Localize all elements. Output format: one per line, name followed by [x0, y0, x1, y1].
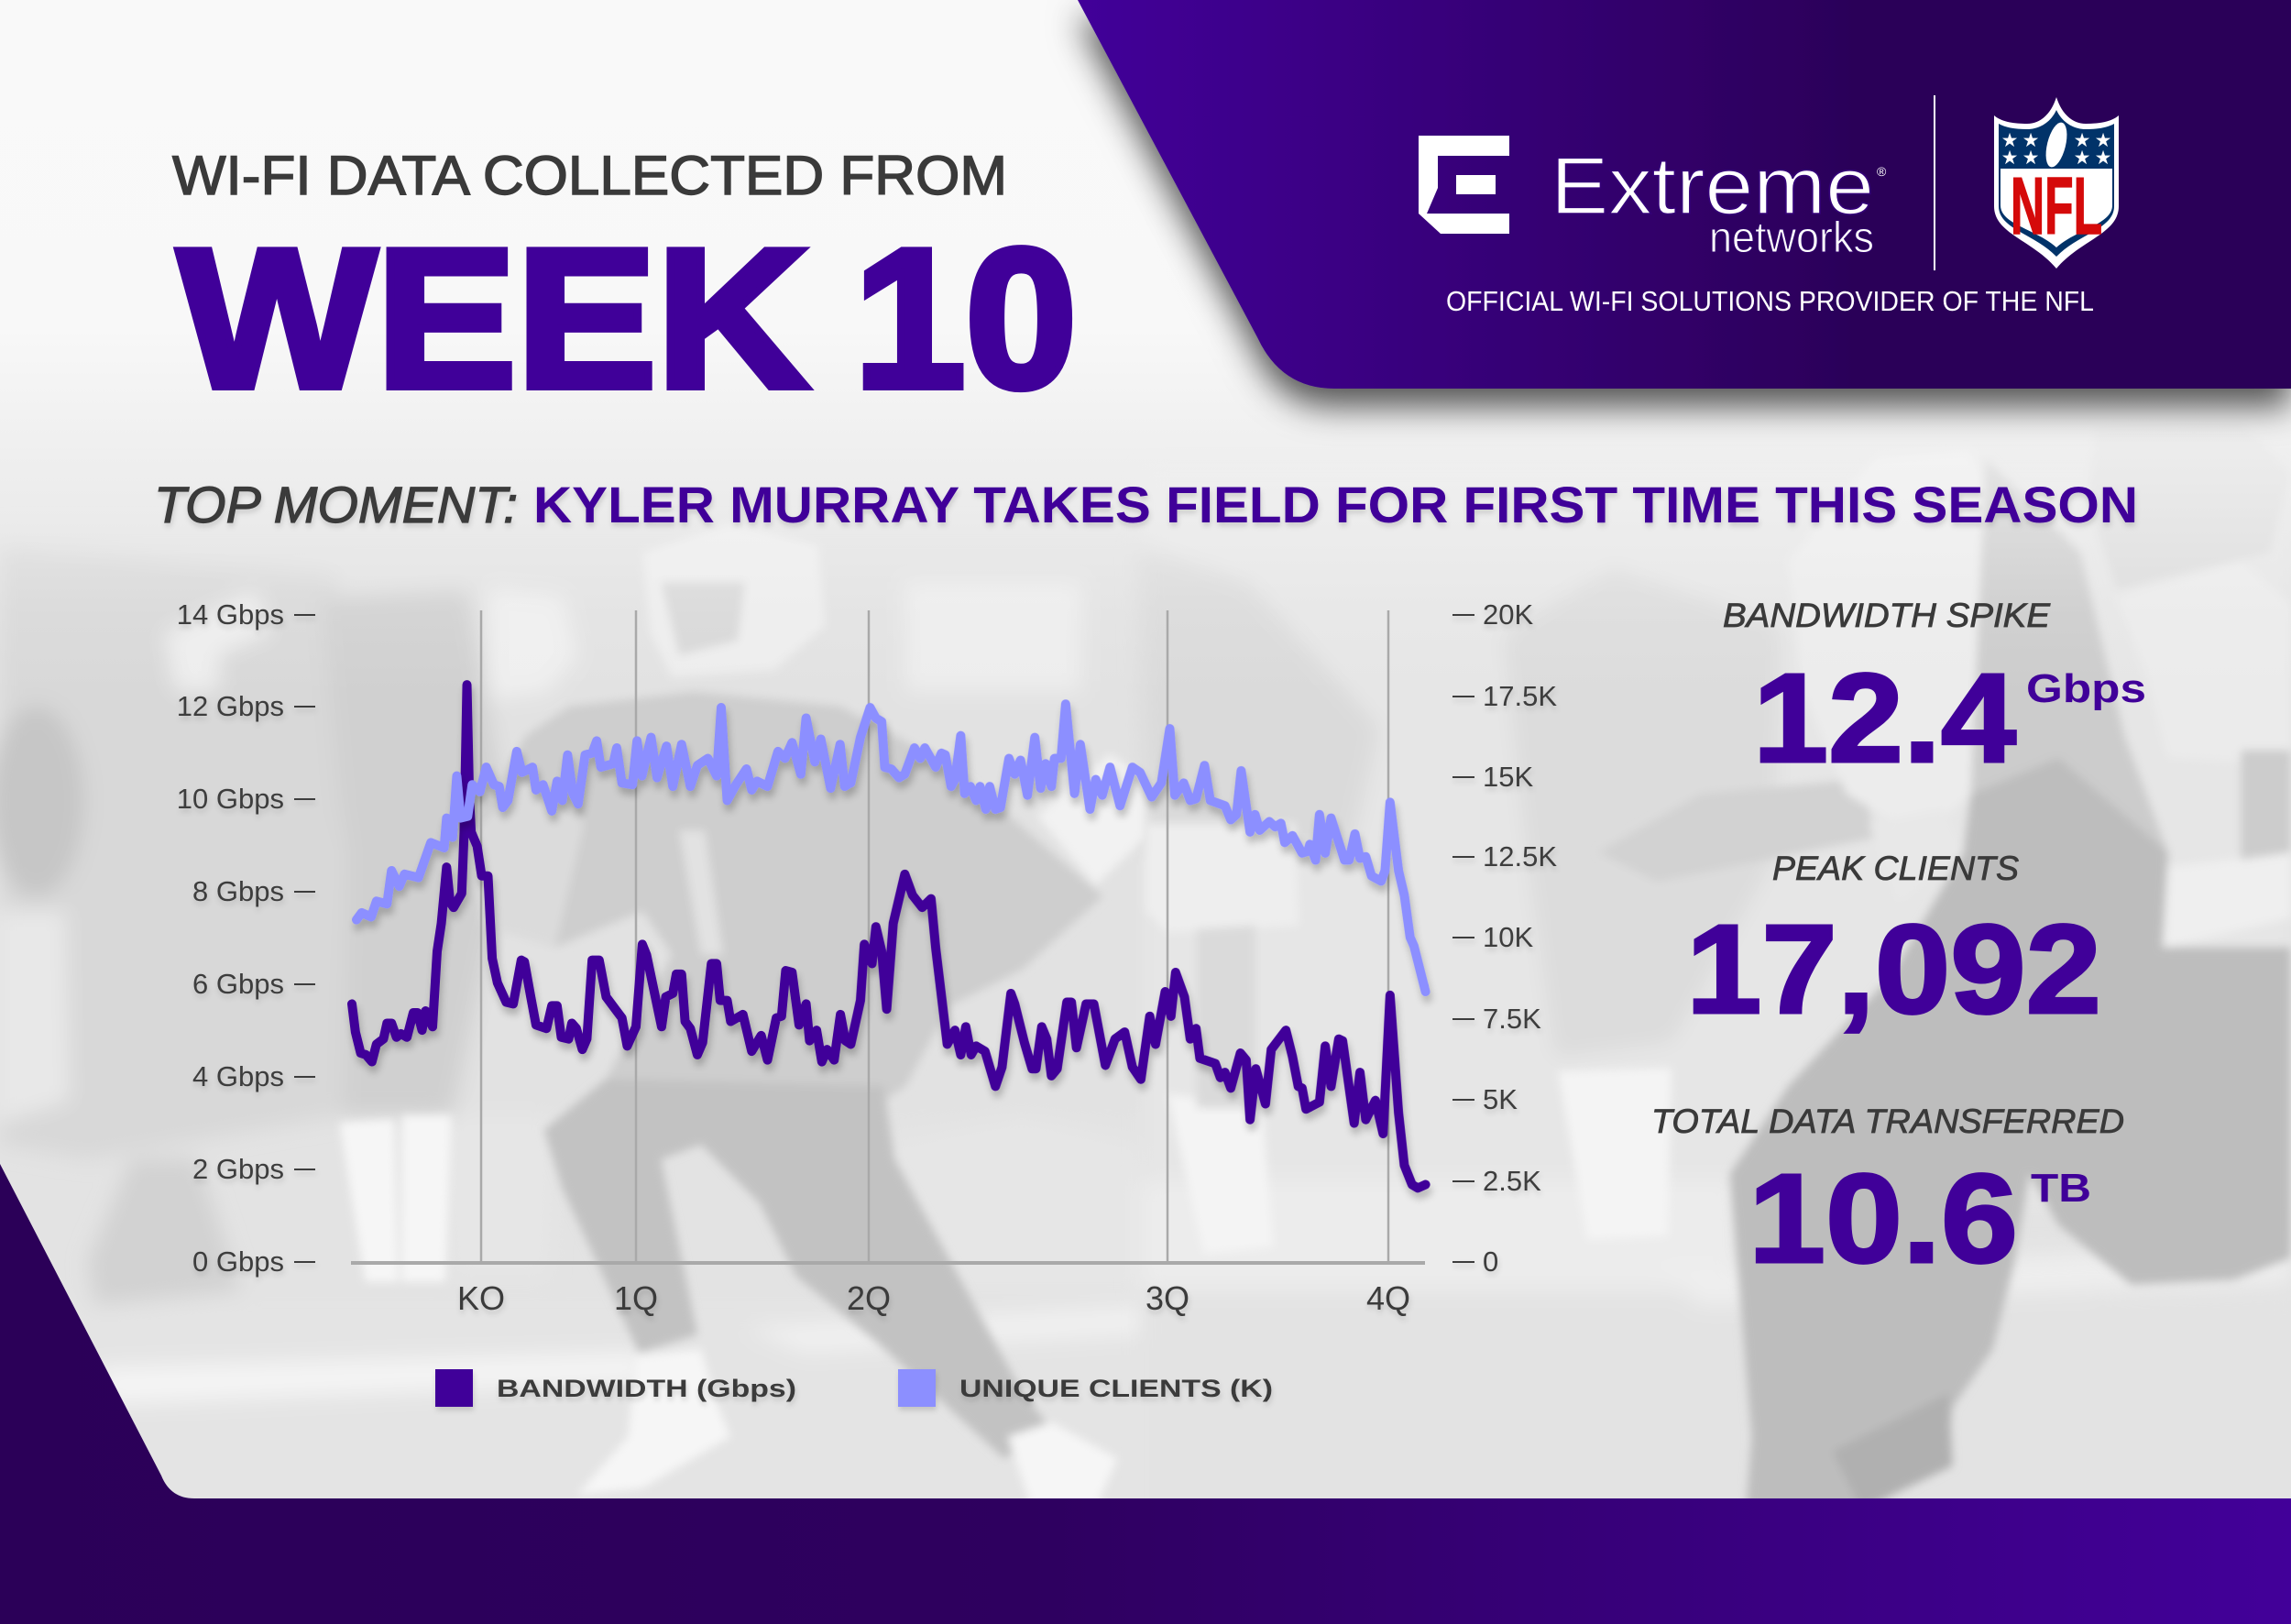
top moment headline: TOP MOMENT: — [154, 476, 518, 533]
x axis quarter labels: 1Q — [614, 1279, 658, 1317]
header panel with logos — [1078, 0, 2291, 389]
right axis labels: unique clients: 7.5K — [1483, 1003, 1541, 1035]
Extreme networks wordmark — [1551, 140, 1887, 261]
icon: NFL shield: ★ — [2022, 130, 2039, 151]
stat: total data transferred: 10.6 — [1748, 1148, 2018, 1289]
icon: NFL shield: ★ — [2095, 148, 2111, 169]
line: unique clients (K) — [356, 704, 1426, 992]
left axis labels: bandwidth: 6 Gbps — [192, 968, 284, 1000]
icon: NFL shield: ★ — [2074, 130, 2090, 151]
top moment headline: KYLER MURRAY TAKES FIELD FOR FIRST TIME THIS SEASON — [533, 476, 2138, 533]
stat: peak clients: 17,092 — [1686, 899, 2101, 1040]
icon: NFL shield: ★ — [2095, 130, 2111, 151]
x axis quarter labels: 2Q — [847, 1279, 891, 1317]
icon: NFL shield: ★ — [2022, 148, 2039, 169]
right axis labels: unique clients — [1452, 598, 1557, 1278]
stat: bandwidth spike — [1723, 597, 2146, 789]
left axis labels: bandwidth: 8 Gbps — [192, 875, 284, 907]
Extreme networks wordmark: Extreme — [1551, 140, 1874, 231]
right axis labels: unique clients: 17.5K — [1483, 680, 1557, 712]
legend: UNIQUE CLIENTS (K) — [959, 1375, 1273, 1402]
icon: NFL shield — [1994, 97, 2119, 269]
right axis labels: unique clients: 0 — [1483, 1245, 1498, 1278]
heading: week 10 — [178, 207, 1077, 429]
Extreme networks wordmark: ® — [1877, 164, 1887, 179]
right axis labels: unique clients: 10K — [1483, 921, 1533, 953]
right axis labels: unique clients: 12.5K — [1483, 840, 1557, 872]
right axis labels: unique clients: 5K — [1483, 1083, 1518, 1115]
stat: bandwidth spike: Gbps — [2026, 666, 2146, 711]
left axis labels: bandwidth: 14 Gbps — [177, 598, 284, 631]
quarter grid lines and axis — [351, 610, 1425, 1263]
right axis labels: unique clients: 20K — [1483, 598, 1533, 631]
heading: wi-fi data collected from: WI-FI DATA COLLECTED FROM — [172, 145, 1007, 206]
line: bandwidth (Gbps) — [352, 685, 1426, 1188]
white and grey players — [340, 523, 1146, 1524]
stat: bandwidth spike: 12.4 — [1753, 648, 2016, 789]
stat: bandwidth spike: BANDWIDTH SPIKE — [1723, 597, 2051, 634]
white fade over top of photo — [0, 0, 2291, 697]
heading: week 10: WEEK — [178, 207, 808, 429]
legend — [435, 1369, 1273, 1407]
x axis quarter labels: 4Q — [1366, 1279, 1410, 1317]
x axis quarter labels — [457, 1279, 1410, 1317]
x axis quarter labels: 3Q — [1146, 1279, 1189, 1317]
stat: total data transferred: TOTAL DATA TRANSFERRED — [1651, 1103, 2124, 1140]
Extreme networks wordmark: networks — [1709, 213, 1874, 261]
stat: peak clients — [1686, 850, 2101, 1040]
left axis labels: bandwidth: 10 Gbps — [177, 783, 284, 815]
left axis labels: bandwidth: 12 Gbps — [177, 690, 284, 722]
heading: week 10: 10 — [854, 207, 1077, 429]
left axis labels: bandwidth: 0 Gbps — [192, 1245, 284, 1278]
chart: bandwidth and unique clients — [177, 598, 1557, 1317]
icon: NFL shield: ★ — [2001, 148, 2018, 169]
official provider tagline: OFFICIAL WI-FI SOLUTIONS PROVIDER OF THE NFL — [1446, 285, 2094, 317]
left axis labels: bandwidth — [177, 598, 315, 1278]
left axis labels: bandwidth: 2 Gbps — [192, 1153, 284, 1185]
footer panel — [0, 1164, 2291, 1624]
stat: total data transferred: TB — [2031, 1166, 2091, 1211]
right axis labels: unique clients: 15K — [1483, 761, 1533, 793]
icon: Extreme Networks E mark — [1419, 136, 1509, 234]
right axis labels: unique clients: 2.5K — [1483, 1165, 1541, 1197]
legend: BANDWIDTH (Gbps) — [497, 1375, 796, 1402]
icon: NFL shield: ★ — [2001, 130, 2018, 151]
icon: NFL shield: NFL — [2011, 160, 2102, 251]
logo divider — [1934, 95, 1935, 270]
left axis labels: bandwidth: 4 Gbps — [192, 1060, 284, 1092]
stat: peak clients: PEAK CLIENTS — [1772, 850, 2019, 887]
stat: total data transferred — [1651, 1103, 2124, 1289]
icon: NFL shield: ★ — [2074, 148, 2090, 169]
x axis quarter labels: KO — [457, 1279, 505, 1317]
